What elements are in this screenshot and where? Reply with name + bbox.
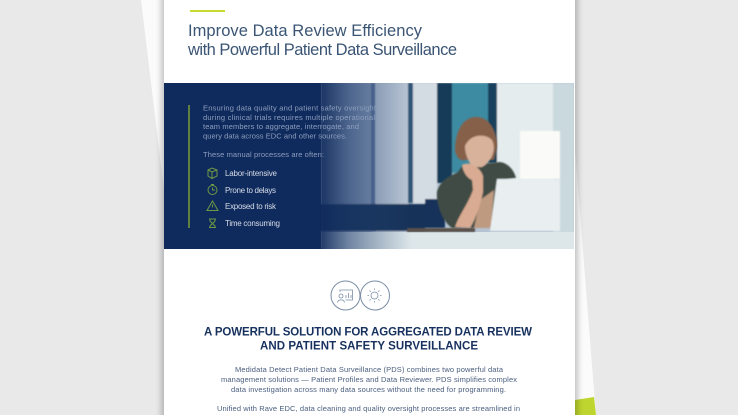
back sheet: right with green corner bbox=[575, 150, 596, 415]
section heading: A POWERFUL SOLUTION FOR AGGREGATED DATA REVIEW bbox=[204, 326, 532, 338]
body text: Medidata Detect Patient Data Surveillance (PDS) combines two powerful data bbox=[235, 365, 504, 374]
icon: stopwatch bbox=[208, 184, 217, 194]
shirt bbox=[437, 162, 516, 228]
section heading: AND PATIENT SAFETY SURVEILLANCE bbox=[260, 340, 478, 352]
face bbox=[465, 136, 494, 167]
panel: hero banner bbox=[164, 83, 574, 249]
photo: woman at laptop bbox=[322, 83, 574, 249]
navy background bbox=[164, 83, 322, 249]
laptop bbox=[490, 179, 560, 231]
icon: labor bbox=[208, 168, 217, 178]
body text: Unified with Rave EDC, data cleaning and quality oversight processes are streamlined in bbox=[217, 404, 520, 413]
hair bbox=[455, 117, 497, 160]
body text bbox=[217, 365, 520, 413]
title: with Powerful Patient Data Surveillance bbox=[187, 41, 457, 59]
body text: data investigation across many data sources without the need for programming. bbox=[231, 385, 506, 394]
icon: data reviewer bbox=[360, 281, 390, 310]
hero intro text bbox=[203, 104, 377, 159]
hero intro text: Ensuring data quality and patient safety oversight bbox=[203, 104, 377, 112]
label: exposed to risk: Exposed to risk bbox=[225, 202, 277, 211]
title bbox=[187, 22, 457, 59]
back sheet: left bbox=[141, 0, 164, 190]
icon: warning triangle bbox=[207, 201, 218, 210]
hero intro text: These manual processes are often: bbox=[203, 150, 324, 159]
blouse bbox=[474, 190, 494, 228]
main sheet bbox=[164, 0, 575, 415]
icon pair: profiles and reviewer bbox=[331, 281, 390, 310]
list: manual process issues bbox=[207, 168, 280, 228]
hero intro text: query data across EDC and other sources. bbox=[203, 132, 347, 140]
accent rule bbox=[190, 10, 225, 12]
icon: patient profile bbox=[331, 281, 360, 310]
label: time consuming: Time consuming bbox=[225, 219, 280, 228]
label: prone to delays: Prone to delays bbox=[225, 186, 276, 195]
body text: management solutions — Patient Profiles and Data Reviewer. PDS simplifies complex bbox=[221, 375, 517, 384]
title: Improve Data Review Efficiency bbox=[188, 22, 423, 40]
hero intro text: during clinical trials requires multiple operational bbox=[203, 113, 375, 122]
hand and forearm bbox=[455, 164, 483, 228]
hero accent bar bbox=[188, 105, 190, 228]
label: labor-intensive: Labor-intensive bbox=[225, 169, 278, 178]
icon: hourglass bbox=[209, 219, 216, 228]
hero intro text: team members to aggregate, interrogate, and bbox=[203, 122, 359, 131]
gradient overlay bbox=[322, 83, 412, 249]
main sheet shadow bbox=[161, 0, 578, 415]
section heading bbox=[204, 326, 532, 352]
